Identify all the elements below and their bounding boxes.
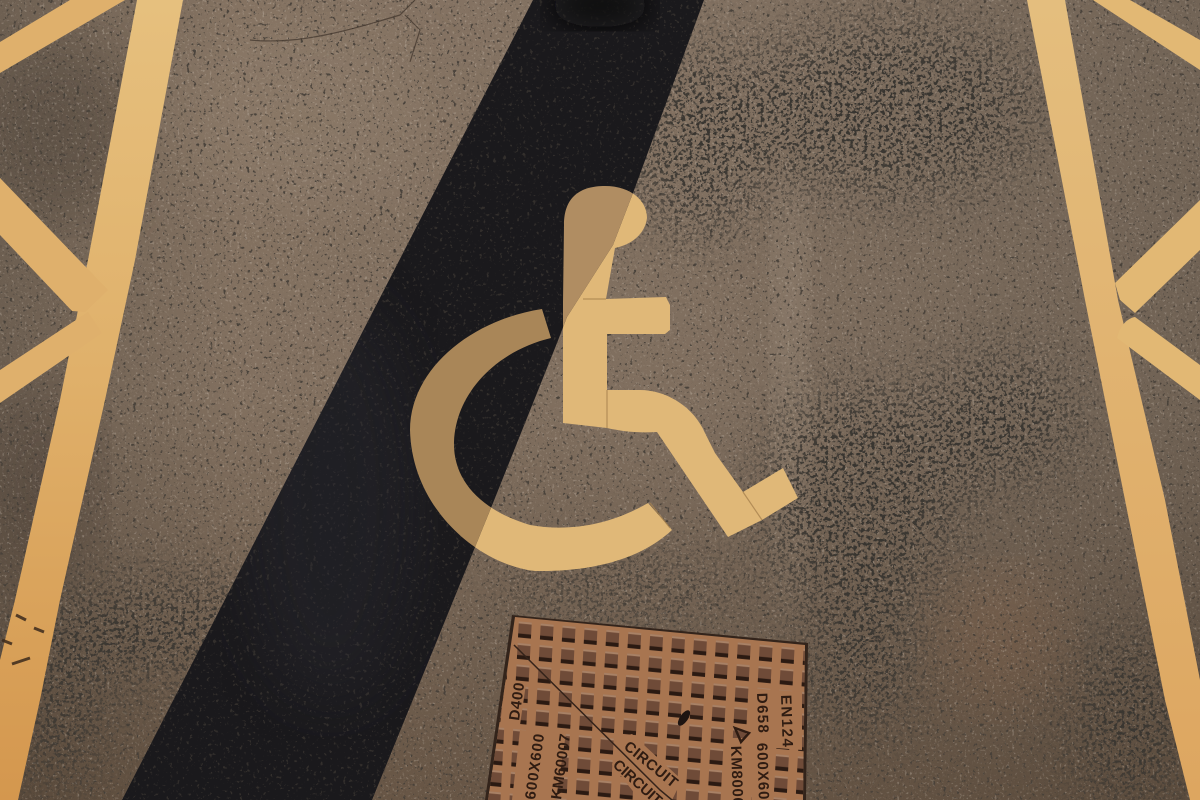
manhole cover xyxy=(480,610,810,800)
wheelchair symbol, sunlit xyxy=(410,186,798,571)
left yellow bay line xyxy=(0,0,183,800)
cast lettering: EN124 xyxy=(777,695,796,748)
right diagonal markings xyxy=(1093,0,1200,400)
worn paint patch on left line xyxy=(2,615,44,664)
cover text columns background xyxy=(500,682,802,800)
cast lettering xyxy=(506,682,796,800)
right yellow bay line xyxy=(1027,0,1200,800)
left diagonal markings xyxy=(0,0,125,403)
wheelchair paint seams xyxy=(583,299,762,528)
diagonal shadow xyxy=(122,0,704,800)
diagonal crack xyxy=(514,645,672,800)
cast lettering: CIRCUIT xyxy=(620,738,681,791)
wheelchair symbol, in shadow xyxy=(410,186,633,547)
cast lettering: D658 xyxy=(753,693,771,733)
cast lettering: D400 xyxy=(506,682,528,722)
cast lettering: 600X600 xyxy=(522,733,548,800)
cast lettering: KM60007 xyxy=(548,733,574,800)
hole in cover xyxy=(678,710,690,726)
